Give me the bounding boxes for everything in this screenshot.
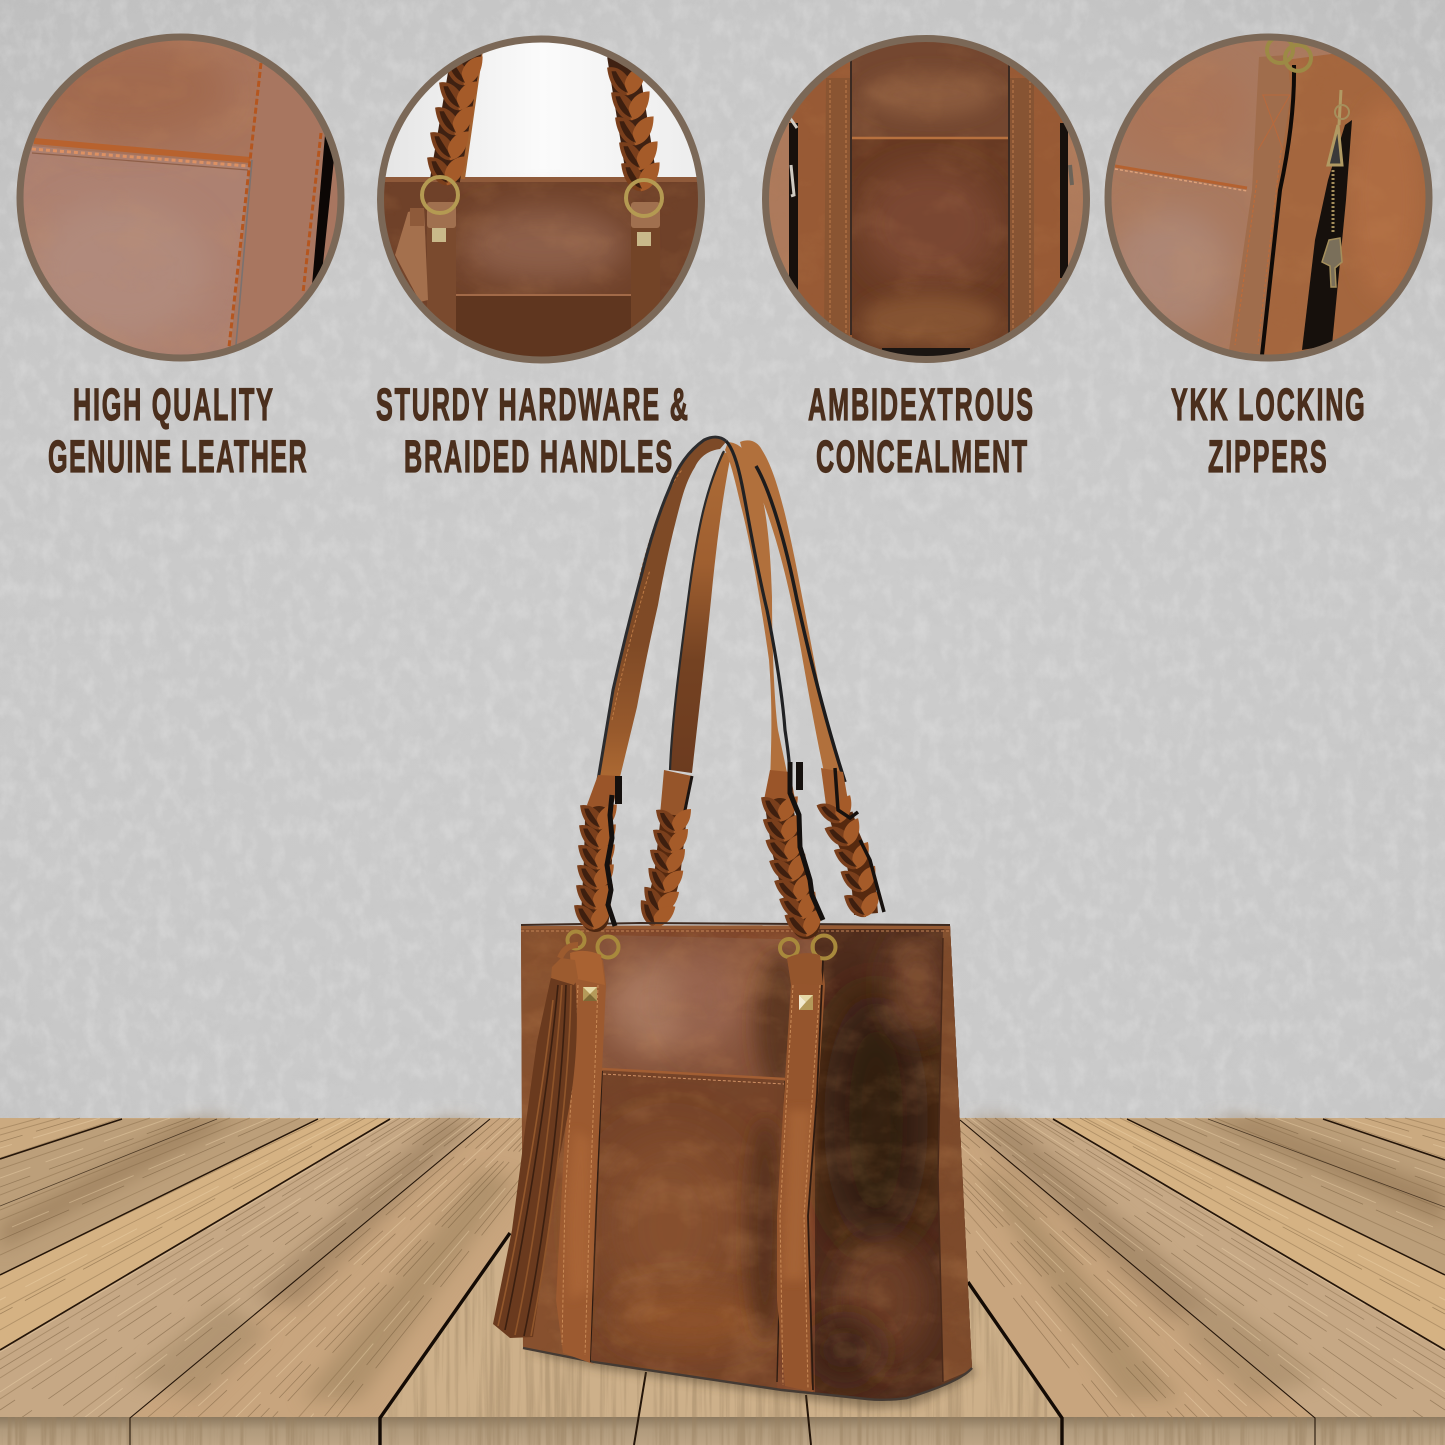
heading: high quality genuine leather: HIGH QUALITY (73, 379, 273, 430)
heading: YKK locking zippers: ZIPPERS (1208, 431, 1327, 482)
heading: YKK locking zippers: YKK LOCKING (1171, 379, 1365, 430)
front left handle (598, 437, 726, 780)
heading: ambidextrous concealment (808, 379, 1033, 482)
heading: YKK locking zippers (1171, 379, 1365, 482)
bag shadow on table (525, 1340, 978, 1408)
bag top rim (521, 923, 950, 925)
heading: ambidextrous concealment: AMBIDEXTROUS (808, 379, 1033, 430)
rings (568, 932, 836, 958)
circle: high quality genuine leather (15, 30, 350, 365)
circle: sturdy hardware and braided handles (375, 30, 710, 367)
heading: sturdy hardware and braided handles: BRAIDED HANDLES (404, 431, 672, 482)
pocket (590, 1069, 785, 1382)
bag bottom edge (523, 1348, 972, 1400)
right strap (777, 957, 825, 1392)
tassel (493, 945, 578, 1338)
front right handle (725, 441, 790, 782)
heading: high quality genuine leather (48, 379, 307, 482)
front right braid (761, 762, 824, 939)
left strap (556, 955, 606, 1365)
product: leather tote bag (493, 437, 985, 1410)
heading: sturdy hardware and braided handles (376, 379, 688, 482)
back right handle (740, 440, 884, 919)
bag body (515, 920, 985, 1410)
strap loops (570, 951, 823, 985)
front left braid (574, 775, 622, 930)
back left handle (636, 451, 731, 930)
circle: ambidextrous concealment (760, 35, 1095, 365)
studs (583, 987, 813, 1010)
wooden table floor (0, 1118, 1445, 1445)
heading: high quality genuine leather: GENUINE LEATHER (48, 431, 307, 482)
circle: YKK locking zippers (1105, 30, 1440, 365)
heading: ambidextrous concealment: CONCEALMENT (816, 431, 1027, 482)
heading: sturdy hardware and braided handles: STURDY HARDWARE & (376, 379, 688, 430)
wall background (0, 0, 1445, 1120)
